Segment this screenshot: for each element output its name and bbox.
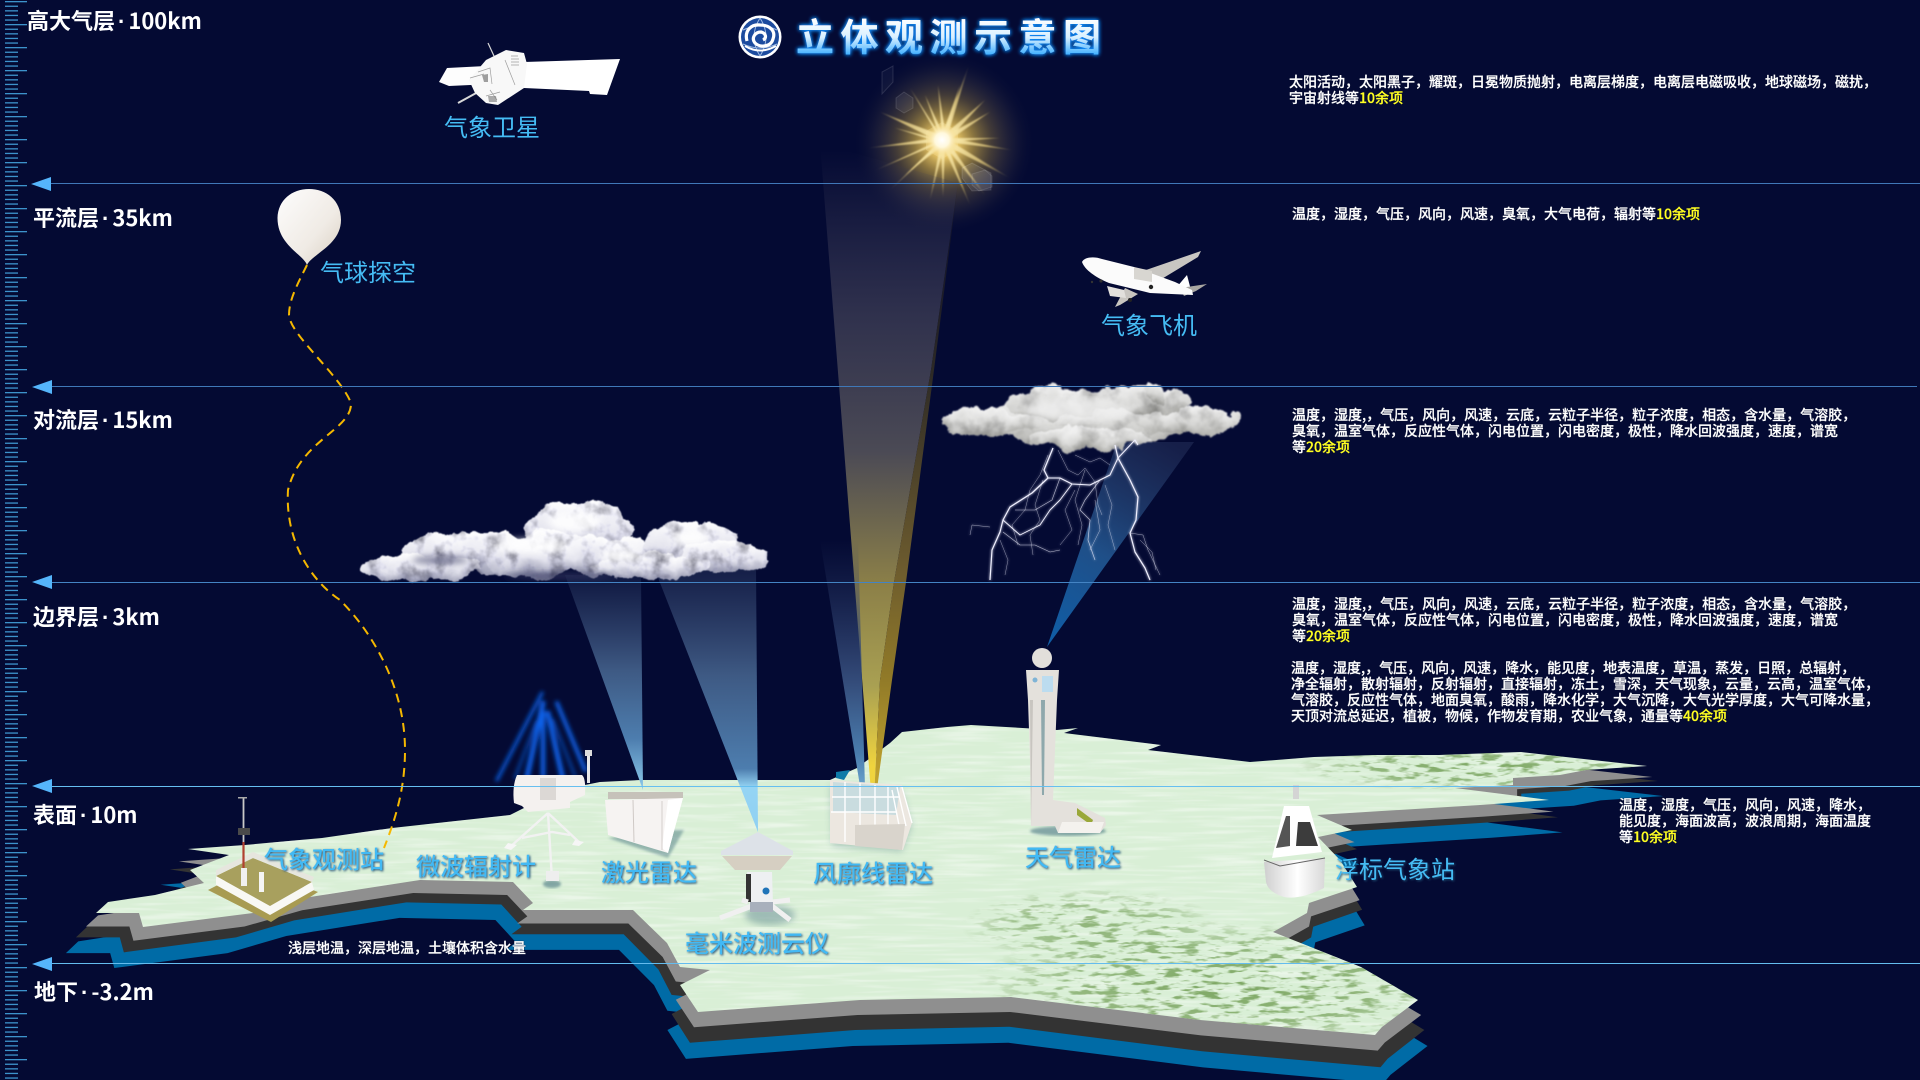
text: surface elements: 净全辐射，散射辐射，反射辐射，直接辐射，冻土，雪深，天气现象，云量，云高，温室气体， xyxy=(1291,674,1879,694)
balloon flight path xyxy=(288,265,405,848)
icon: wind profiler radar xyxy=(830,770,912,852)
text: marine elements: 等10余项 xyxy=(1619,827,1677,847)
land depth: grey band xyxy=(86,735,1652,1051)
text: boundary layer elements: 等20余项 xyxy=(1292,626,1350,646)
label: weather radar: 天气雷达 xyxy=(1025,838,1121,873)
land depth: blue water edge xyxy=(66,752,1663,1080)
lidar beam xyxy=(565,575,643,790)
text: boundary layer elements: 臭氧，温室气体，反应性气体，闪电位置，闪电密度，极性，降水回波强度，速度，谱宽 xyxy=(1292,610,1838,630)
weather radar beam xyxy=(1047,442,1194,647)
text: high atmosphere elements: 宇宙射线等10余项 xyxy=(1289,88,1403,108)
text: boundary layer elements: 温度，湿度,，气压，风向，风速，云底，云粒子半径，粒子浓度，相态，含水量，气溶胶， xyxy=(1292,594,1856,614)
label: buoy station: 浮标气象站 xyxy=(1335,850,1455,885)
layer divider lines and arrows xyxy=(31,177,1920,971)
layer label: stratosphere: 平流层·35km xyxy=(33,201,173,233)
layer label: troposphere: 对流层·15km xyxy=(33,403,173,435)
label: cloud radar: 毫米波测云仪 xyxy=(685,924,829,959)
layer label: upper atmosphere: 高大气层·100km xyxy=(27,4,202,36)
icon: weather station xyxy=(208,797,318,922)
text: underground elements: 浅层地温，深层地温，土壤体积含水量 xyxy=(288,938,526,958)
text: stratosphere elements: 温度，湿度，气压，风向，风速，臭氧，大气电荷，辐射等10余项 xyxy=(1292,204,1700,224)
text: troposphere elements: 臭氧，温室气体，反应性气体，闪电位置，闪电密度，极性，降水回波强度，速度，谱宽 xyxy=(1292,421,1838,441)
cloud: boundary layer xyxy=(362,502,771,581)
label: wind profiler: 风廓线雷达 xyxy=(813,854,933,889)
text: surface elements: 气溶胶，反应性气体，地面臭氧，酸雨，降水化学，大气沉降，大气光学厚度，大气可降水量， xyxy=(1291,690,1879,710)
lens flare hexagons xyxy=(882,66,992,191)
label: weather station: 气象观测站 xyxy=(264,840,384,875)
label: balloon sounding: 气球探空 xyxy=(320,253,416,288)
label: satellite: 气象卫星 xyxy=(444,108,540,143)
icon: meteorological aircraft xyxy=(1082,251,1207,307)
cloud radar beam xyxy=(653,565,758,832)
label: microwave radiometer: 微波辐射计 xyxy=(416,847,536,882)
land surface xyxy=(90,720,1670,1050)
icon: lidar xyxy=(605,792,684,858)
icon: buoy station xyxy=(1264,785,1325,898)
text: troposphere elements: 等20余项 xyxy=(1292,437,1350,457)
text: surface elements: 天顶对流总延迟，植被，物候，作物发育期，农业气象，通量等40余项 xyxy=(1291,706,1727,726)
sun glow and rays xyxy=(852,51,1036,235)
text: surface elements: 温度，湿度,，气压，风向，风速，降水，能见度，地表温度，草温，蒸发，日照，总辐射， xyxy=(1291,658,1855,678)
text: high atmosphere elements: 太阳活动，太阳黑子，耀斑，日冕物质抛射，电离层梯度，电离层电磁吸收，地球磁场，磁扰， xyxy=(1289,72,1877,92)
wind profiler beam xyxy=(820,540,866,823)
icon: microwave radiometer xyxy=(497,693,592,888)
layer label: surface: 表面·10m xyxy=(33,798,138,830)
text: troposphere elements: 温度，湿度,，气压，风向，风速，云底，云粒子半径，粒子浓度，相态，含水量，气溶胶， xyxy=(1292,405,1856,425)
land depth: dark band xyxy=(76,737,1658,1067)
altitude ruler xyxy=(0,0,30,1080)
cloud: thunderstorm xyxy=(940,383,1240,449)
lightning xyxy=(970,440,1160,580)
layer label: underground: 地下·-3.2m xyxy=(34,975,154,1007)
label: aircraft: 气象飞机 xyxy=(1101,306,1197,341)
icon: balloon xyxy=(278,189,341,265)
icon: meteorological satellite xyxy=(439,43,620,105)
icon: weather radar tower xyxy=(1026,648,1106,836)
text: marine elements: 能见度，海面波高，波浪周期，海面温度 xyxy=(1619,811,1871,831)
sun beam xyxy=(820,143,958,818)
layer label: boundary layer: 边界层·3km xyxy=(33,600,160,632)
label: lidar: 激光雷达 xyxy=(601,853,697,888)
title: 立体观测示意图 xyxy=(796,7,1108,62)
text: marine elements: 温度，湿度，气压，风向，风速，降水， xyxy=(1619,795,1871,815)
icon: cloud radar xyxy=(720,832,795,925)
title logo xyxy=(738,16,782,58)
